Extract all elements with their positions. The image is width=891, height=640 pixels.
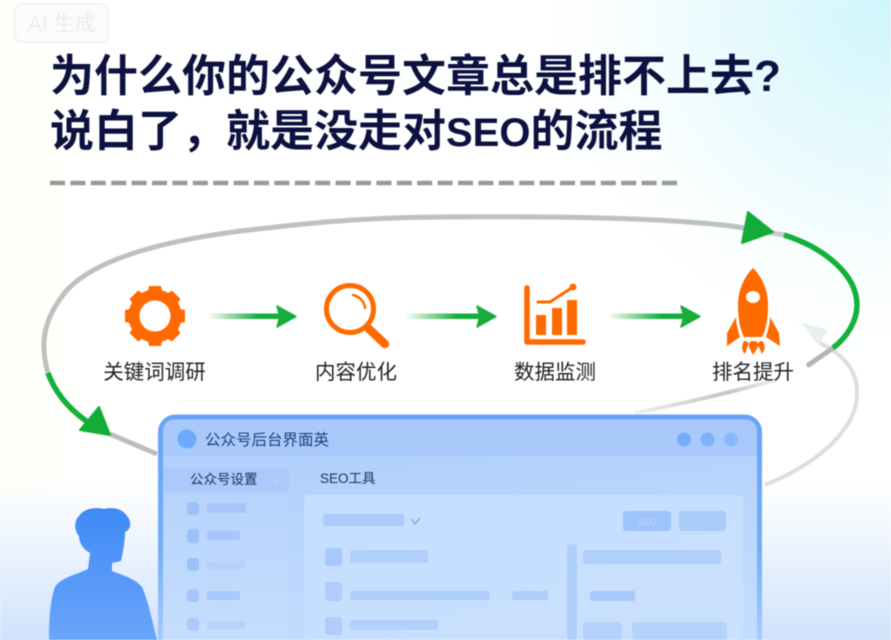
arrow: step 2 to 3: [405, 306, 496, 327]
badge: AI生成: AI 生成: [28, 13, 96, 36]
icon: header circle: [178, 430, 196, 448]
icon: magnifier: [326, 286, 385, 344]
arrowhead: top green: [742, 212, 773, 243]
loop: grey and green cycle path: [44, 212, 857, 485]
tab label: SEO工具: [320, 471, 376, 486]
step: ranking up: [712, 268, 794, 384]
arrow: step 3 to 4: [608, 306, 700, 327]
panel: WeChat backend window: [160, 417, 760, 640]
step: data monitoring: [514, 284, 596, 384]
step: content optimisation: 内容优化: [315, 361, 397, 384]
icon: rocket: [727, 268, 780, 355]
step: keyword research: [103, 286, 206, 384]
step: data monitoring: 数据监测: [514, 361, 596, 384]
arrowhead: faded: [802, 323, 828, 345]
icon: person silhouette: [49, 508, 157, 640]
window header: 公众号后台界面英: [205, 431, 330, 449]
main content panel: SEO: [637, 517, 657, 527]
title: [50, 52, 781, 156]
arrow: step 1 to 2: [208, 306, 296, 327]
icon: bar chart: [527, 284, 583, 342]
sidebar: [163, 457, 289, 640]
badge: AI生成: [15, 4, 108, 42]
step: content optimisation: [315, 286, 397, 384]
step: keyword research: 关键词调研: [103, 361, 206, 384]
icon: gear: [125, 286, 185, 346]
step: ranking up: 排名提升: [712, 361, 794, 384]
window header: [163, 420, 757, 456]
sidebar: 公众号设置: [190, 472, 258, 487]
main content panel: [304, 495, 743, 640]
title: 为什么你的公众号文章总是排不上去?: [50, 52, 781, 101]
arrowhead: left green: [80, 407, 110, 435]
title: 说白了，就是没走对SEO的流程: [50, 107, 662, 156]
